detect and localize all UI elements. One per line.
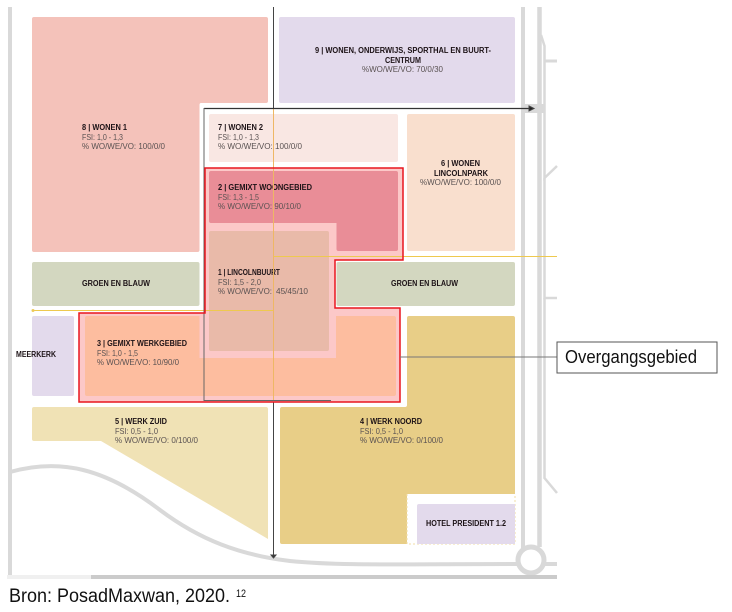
panel: zone 2 gemixt woongebied: 2 | GEMIXT WOONGEBIED — [218, 183, 312, 192]
panel: hotel president — [417, 504, 515, 544]
panel: zone 8 wonen 1: % WO/WE/VO: 100/0/0 — [82, 142, 166, 151]
panel: zone 7 wonen 2 — [209, 114, 398, 162]
panel: zone 8 wonen 1: 8 | WONEN 1 — [82, 123, 128, 132]
panel: zone 1 lincolnbuurt — [209, 231, 329, 351]
panel: zone 1 lincolnbuurt: FSI: 1,5 - 2,0 — [218, 278, 262, 287]
panel: zone 7 wonen 2: 7 | WONEN 2 — [218, 123, 264, 132]
panel: groen en blauw left — [32, 262, 200, 306]
panel: zone 8 wonen 1: FSI: 1,0 - 1,3 — [82, 133, 123, 142]
site plan — [7, 7, 557, 577]
panel: meerkerk: MEERKERK — [16, 350, 56, 359]
panel: zone 7 wonen 2: % WO/WE/VO: 100/0/0 — [218, 142, 303, 151]
panel: overgangsgebied red outlined area — [79, 168, 403, 402]
panel: zone 6 wonen lincolnpark: 6 | WONEN — [441, 159, 480, 168]
panel: zone 6 wonen lincolnpark — [407, 114, 515, 251]
panel: groen en blauw left: GROEN EN BLAUW — [82, 279, 150, 288]
panel: zone 4 werk noord: 4 | WERK NOORD — [360, 417, 422, 426]
panel: zone 6 wonen lincolnpark: LINCOLNPARK — [434, 169, 488, 178]
panel: zone 5 werk zuid: 5 | WERK ZUID — [115, 417, 167, 426]
panel: hotel president: HOTEL PRESIDENT 1.2 — [426, 519, 506, 528]
panel: zone 4 werk noord: FSI: 0,5 - 1,0 — [360, 427, 404, 436]
panel: zone 9 wonen onderwijs sporthal: 9 | WONEN, ONDERWIJS, SPORTHAL EN BUURT- — [315, 46, 491, 55]
callout: overgangsgebied: Overgangsgebied — [565, 347, 697, 367]
panel: zone 4 werk noord — [280, 316, 515, 544]
panel: zone 5 werk zuid: % WO/WE/VO: 0/100/0 — [115, 436, 199, 445]
panel: zone 1 lincolnbuurt: % WO/WE/VO: — [218, 287, 272, 296]
panel: groen en blauw right — [336, 262, 515, 306]
panel: zone 5 werk zuid — [32, 407, 268, 539]
black route lines with arrows — [204, 7, 534, 558]
red outline of transition zone — [79, 168, 403, 402]
callout: overgangsgebied — [557, 342, 717, 373]
panel: zone 9 wonen onderwijs sporthal: %WO/WE/VO: 70/0/30 — [362, 65, 444, 74]
connector line — [400, 356, 557, 358]
panel: zone 9 wonen onderwijs sporthal — [279, 17, 515, 103]
panel: zone 3 gemengd werkgebied: % WO/WE/VO: 10/90/0 — [97, 358, 180, 367]
source caption: Bron: PosadMaxwan, 2020. — [9, 586, 230, 607]
panel: zone 3 gemengd werkgebied: 3 | GEMIXT WERKGEBIED — [97, 339, 187, 348]
road network — [7, 7, 557, 577]
panel: zone 3 gemengd werkgebied — [85, 316, 396, 396]
panel: zone 9 wonen onderwijs sporthal: CENTRUM — [385, 56, 421, 65]
panel: zone 5 werk zuid: FSI: 0,5 - 1,0 — [115, 427, 159, 436]
panel: zone 2 gemixt woongebied: FSI: 1,3 - 1,5 — [218, 193, 259, 202]
panel: zone 4 werk noord: % WO/WE/VO: 0/100/0 — [360, 436, 444, 445]
panel: zone 8 wonen 1 — [32, 17, 268, 252]
panel: zone 1 lincolnbuurt: 45/45/10 — [276, 287, 309, 296]
panel: zone 2 gemixt woongebied — [209, 171, 398, 251]
panel: zone 1 lincolnbuurt: 1 | LINCOLNBUURT — [218, 268, 280, 277]
panel: zone 6 wonen lincolnpark: %WO/WE/VO: 100/0/0 — [420, 178, 502, 187]
yellow route lines — [32, 108, 557, 400]
panel: zone 2 gemixt woongebied: % WO/WE/VO: 90/10/0 — [218, 202, 302, 211]
panel: zone 3 gemengd werkgebied: FSI: 1,0 - 1,5 — [97, 349, 138, 358]
panel: groen en blauw right: GROEN EN BLAUW — [391, 279, 458, 288]
panel: zone 7 wonen 2: FSI: 1,0 - 1,3 — [218, 133, 259, 142]
source caption: 12 — [236, 588, 246, 600]
panel: meerkerk — [16, 316, 74, 396]
